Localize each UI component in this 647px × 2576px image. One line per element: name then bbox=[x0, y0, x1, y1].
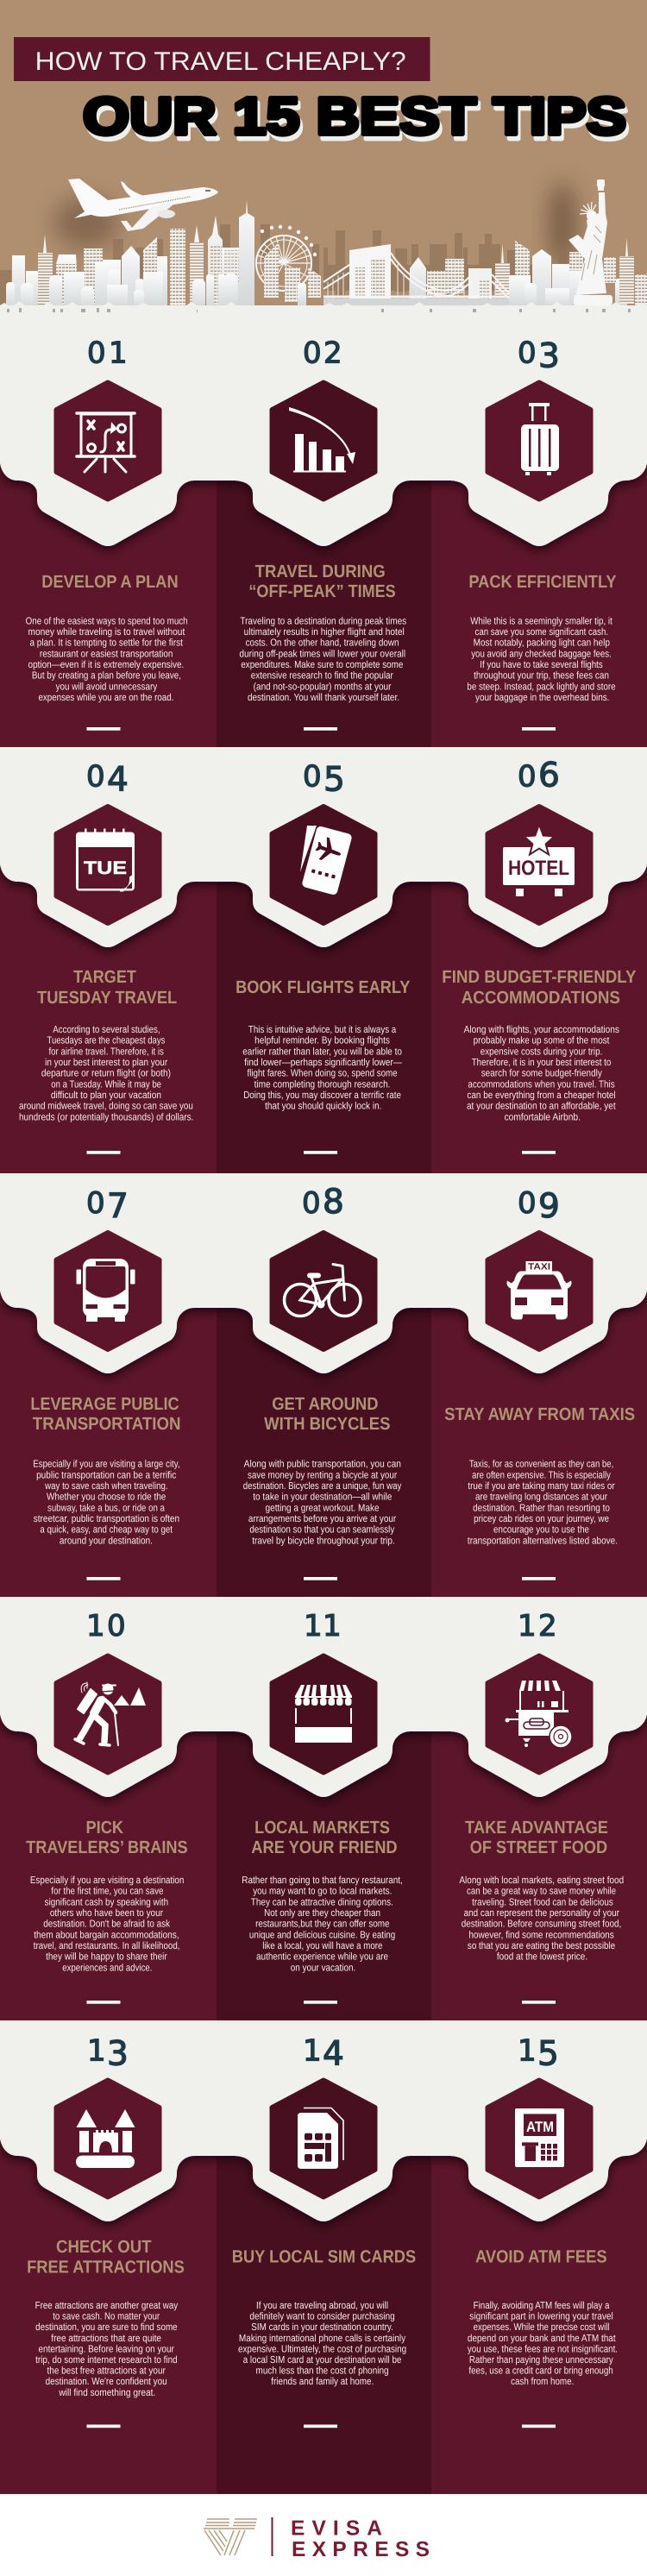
body text: cash from home. bbox=[511, 2376, 574, 2387]
body text bbox=[19, 1024, 193, 1122]
number 06: 6 bbox=[538, 757, 560, 795]
body text bbox=[242, 1024, 402, 1112]
body text: trip, do some internet research to find bbox=[35, 2354, 178, 2366]
icon: market stall bbox=[273, 1656, 374, 1772]
body text: destination. We're confident you bbox=[46, 2376, 167, 2387]
icon: falling bar chart bbox=[273, 383, 374, 499]
heading bbox=[26, 1818, 188, 1857]
body text: expensive costs during your trip. bbox=[481, 1046, 602, 1057]
body text: accommodations when you travel. This bbox=[468, 1078, 615, 1090]
panel: tip 05 book flights early bbox=[236, 760, 411, 1154]
body text: true if you are taking many taxi rides or bbox=[468, 1480, 615, 1492]
panel: tip 08 get around with bicycles bbox=[243, 1183, 402, 1580]
number 08: 0 bbox=[302, 1186, 321, 1221]
body text bbox=[30, 1875, 184, 1973]
panel: row 1 background bbox=[0, 312, 647, 747]
icon: bus bbox=[57, 1233, 159, 1349]
panel: tip 11 local markets are your friend bbox=[242, 1609, 403, 2004]
illustration: city skyline bbox=[0, 179, 647, 315]
number 15: 1 bbox=[518, 2034, 537, 2069]
number 10: 0 bbox=[107, 1609, 126, 1643]
body text: around midweek travel, doing so can save you bbox=[19, 1101, 193, 1112]
panel: tip 02 travel during off-peak times bbox=[239, 336, 406, 731]
body text bbox=[467, 615, 616, 703]
heading: BOOK FLIGHTS EARLY bbox=[236, 977, 411, 997]
body text: however, find some recommendations bbox=[468, 1929, 614, 1940]
body text bbox=[33, 1459, 180, 1546]
body text: Doing this, you may discover a terrific rate bbox=[243, 1090, 401, 1101]
heading bbox=[465, 1818, 608, 1857]
body text: to save cash. No matter your bbox=[53, 2311, 160, 2322]
footer: evisa express logo bbox=[204, 2517, 430, 2561]
body text: be steep. Instead, pack lightly and store bbox=[467, 681, 616, 692]
body text bbox=[459, 1875, 624, 1963]
number 07: 7 bbox=[107, 1187, 129, 1226]
wheel bbox=[256, 236, 311, 291]
heading: “OFF-PEAK” TIMES bbox=[248, 581, 396, 601]
body text: so that you are eating the best possible bbox=[468, 1940, 615, 1951]
icon: suitcase bbox=[488, 383, 590, 499]
heading: AVOID ATM FEES bbox=[475, 2247, 607, 2267]
body text: public transportation can be a terrific bbox=[36, 1469, 176, 1480]
panel: header background bbox=[0, 0, 647, 309]
body text: Therefore, it is in your best interest to bbox=[472, 1057, 611, 1068]
body text: they will be happy to share their bbox=[46, 1951, 167, 1963]
body text: If you have to take several flights bbox=[480, 659, 603, 670]
body text: hundreds (or potentially thousands) of dollars. bbox=[19, 1111, 193, 1122]
number 14: 1 bbox=[303, 2034, 322, 2069]
body text: Along with public transportation, you can bbox=[244, 1459, 401, 1470]
heading bbox=[264, 1394, 390, 1434]
body text: on your vacation. bbox=[291, 1962, 355, 1973]
icon: street food cart bbox=[488, 1656, 590, 1772]
body text: the best free attractions at your bbox=[47, 2366, 166, 2377]
number 09: 9 bbox=[538, 1187, 560, 1226]
heading: TRAVELERS’ BRAINS bbox=[26, 1838, 188, 1857]
heading bbox=[27, 2237, 185, 2278]
body text: experiences and advice. bbox=[62, 1962, 152, 1973]
body text: will find something great. bbox=[59, 2387, 155, 2398]
right blocks bbox=[515, 241, 530, 302]
body text: If you are traveling abroad, you will bbox=[256, 2300, 388, 2311]
body text: depend on your bank and the ATM that bbox=[468, 2333, 616, 2344]
body text: definitely want to consider purchasing bbox=[249, 2311, 395, 2322]
number 01: 0 bbox=[87, 336, 106, 371]
icon: logo mark bbox=[204, 2519, 257, 2555]
body text: Taxis, for as convenient as they can be, bbox=[469, 1459, 613, 1470]
body text: destination. Before consuming street food, bbox=[462, 1919, 621, 1930]
body text: destination. You will thank yourself later. bbox=[248, 692, 399, 703]
body text: expensive. Ultimately, the cost of purchasing bbox=[238, 2343, 406, 2354]
number 11: 1 bbox=[304, 1609, 323, 1643]
body text: way to save cash when traveling. bbox=[44, 1480, 168, 1492]
heading: PACK EFFICIENTLY bbox=[468, 572, 617, 592]
body text: Free attractions are another great way bbox=[35, 2300, 178, 2311]
number 02: 2 bbox=[324, 336, 342, 371]
heading: ARE YOUR FRIEND bbox=[251, 1838, 398, 1857]
heading: STAY AWAY FROM TAXIS bbox=[444, 1404, 635, 1424]
body text: While this is a seemingly smaller tip, it bbox=[470, 615, 612, 626]
heading bbox=[251, 1818, 398, 1857]
body text: earlier rather than later, you will be able to bbox=[242, 1046, 402, 1057]
heading: BUY LOCAL SIM CARDS bbox=[232, 2247, 416, 2267]
number 12: 2 bbox=[538, 1609, 557, 1643]
icon: hotel sign: HOTEL bbox=[508, 857, 569, 880]
body text: entertaining. Before leaving on your bbox=[38, 2343, 174, 2354]
body text: on a Tuesday. While it may be bbox=[51, 1078, 161, 1090]
body text: throughout your trip, these fees can bbox=[474, 670, 609, 682]
panel: tip 06 find budget-friendly accommodations bbox=[442, 757, 637, 1154]
heading: LOCAL MARKETS bbox=[254, 1818, 390, 1838]
heading bbox=[442, 967, 637, 1008]
houses row bbox=[0, 301, 647, 315]
number 01: 1 bbox=[109, 336, 128, 371]
title: our 15 best tips: OUR 15 BEST TIPS bbox=[85, 91, 629, 150]
wordmark: EVISA bbox=[291, 2517, 382, 2540]
body text: time completing thorough research. bbox=[254, 1078, 390, 1090]
body text: getting a great workout. Make bbox=[266, 1502, 380, 1513]
panel: tip 12 take advantage of street food bbox=[459, 1609, 624, 2004]
body text: that you should quickly lock in. bbox=[265, 1101, 381, 1112]
body text: destination. Rather than resorting to bbox=[473, 1502, 610, 1513]
body text bbox=[26, 615, 188, 703]
heading: CHECK OUT bbox=[56, 2237, 152, 2257]
panel: tip 14 buy local sim cards bbox=[232, 2034, 416, 2428]
icon: hiker bbox=[57, 1656, 159, 1772]
body text: for airline travel. Therefore, it is bbox=[48, 1046, 164, 1057]
body text: destination. Bicycles are a unique, fun way bbox=[243, 1480, 402, 1492]
body text: significant part in lowering your travel bbox=[469, 2311, 613, 2322]
icon: boarding pass bbox=[273, 807, 374, 923]
number 08: 8 bbox=[323, 1183, 344, 1222]
heading: TRANSPORTATION bbox=[33, 1414, 180, 1434]
body text: search for some budget-friendly bbox=[481, 1068, 602, 1079]
body text: probably make up some of the most bbox=[474, 1035, 610, 1046]
body text: around your destination. bbox=[60, 1535, 153, 1546]
body text: difficult to plan your vacation bbox=[51, 1090, 161, 1101]
body text: (and not-so-popular) months at your bbox=[254, 681, 392, 692]
body text: fees, use a credit card or bring enough bbox=[468, 2366, 613, 2377]
body text: a local SIM card at your destination will be bbox=[243, 2354, 401, 2366]
body text: you avoid any checked baggage fees. bbox=[471, 648, 612, 659]
icon: bicycle bbox=[273, 1233, 374, 1349]
number 07: 0 bbox=[86, 1186, 105, 1221]
panel: tip 13 check out free attractions bbox=[27, 2034, 185, 2428]
heading bbox=[30, 1394, 180, 1434]
body text: and can represent the personality of your bbox=[464, 1907, 619, 1919]
icon: bouncy castle bbox=[57, 2081, 159, 2196]
heading: FIND BUDGET-FRIENDLY bbox=[442, 967, 637, 987]
body text: encourage you to use the bbox=[493, 1524, 589, 1536]
bridge bbox=[349, 244, 391, 299]
heading bbox=[248, 562, 396, 601]
number 05: 5 bbox=[324, 761, 345, 800]
body text: Whether you choose to ride the bbox=[47, 1492, 166, 1503]
number 15: 5 bbox=[537, 2034, 559, 2074]
panel: tip 09 stay away from taxis bbox=[444, 1186, 635, 1580]
body text: They can be attractive dining options. bbox=[251, 1896, 393, 1907]
body text: This is intuitive advice, but it is always a bbox=[248, 1024, 397, 1035]
body text bbox=[468, 2300, 618, 2387]
wordmark bbox=[291, 2517, 430, 2561]
body text bbox=[464, 1024, 619, 1122]
number 06: 0 bbox=[518, 760, 537, 795]
body text: Tuesdays are the cheapest days bbox=[47, 1035, 165, 1046]
body text bbox=[238, 2300, 406, 2387]
panel: row 2 background bbox=[0, 747, 647, 1173]
icon: calendar: TUE bbox=[84, 858, 127, 878]
body text: streetcar, public transportation is often bbox=[34, 1513, 179, 1524]
illustration: airplane bbox=[68, 179, 218, 231]
number 02: 0 bbox=[303, 336, 322, 371]
number 11: 1 bbox=[323, 1609, 342, 1643]
body text: One of the easiest ways to spend too much bbox=[26, 615, 188, 626]
heading: how to travel cheaply bbox=[14, 37, 430, 81]
body text: at your destination to an affordable, yet bbox=[467, 1101, 616, 1112]
body text: But by creating a plan before you leave, bbox=[32, 670, 181, 682]
number 04: 4 bbox=[107, 761, 129, 800]
icon: taxi bbox=[488, 1233, 590, 1349]
panel: tip 01 develop a plan bbox=[26, 336, 188, 731]
body text bbox=[35, 2300, 178, 2398]
heading: ACCOMMODATIONS bbox=[462, 988, 620, 1008]
heading: WITH BICYCLES bbox=[264, 1414, 390, 1434]
body text: destination. Don't be afraid to ask bbox=[43, 1919, 170, 1930]
panel: tip 07 leverage public transportation bbox=[30, 1186, 180, 1580]
body text: helpful reminder. By booking flights bbox=[254, 1035, 390, 1046]
heading: TAKE ADVANTAGE bbox=[465, 1818, 608, 1838]
body text: much less than the cost of phoning bbox=[256, 2366, 389, 2377]
body text: pricey cab rides on your journey, we bbox=[474, 1513, 609, 1524]
heading: OF STREET FOOD bbox=[470, 1838, 607, 1857]
body text: others who have been to your bbox=[50, 1907, 163, 1919]
body text: option—even if it is extremely expensive. bbox=[28, 659, 184, 670]
body text: arrangements before you arrive at your bbox=[248, 1513, 396, 1524]
body text: travel by bicycle throughout your trip. bbox=[252, 1535, 395, 1546]
body text: extensive research to find the popular bbox=[251, 670, 393, 682]
body text: can save you some significant cash. bbox=[475, 626, 608, 638]
wordmark: EXPRESS bbox=[292, 2538, 430, 2561]
body text: in your best interest to plan your bbox=[45, 1057, 167, 1068]
number 10: 1 bbox=[86, 1609, 105, 1643]
body text: free attractions that are quite bbox=[51, 2333, 161, 2344]
heading: DEVELOP A PLAN bbox=[41, 572, 179, 592]
heading: LEVERAGE PUBLIC bbox=[30, 1394, 179, 1414]
body text bbox=[239, 615, 406, 703]
icon: sim cards bbox=[273, 2081, 374, 2196]
body text: Especially if you are visiting a destination bbox=[30, 1875, 184, 1886]
body text: traveling. Street food can be delicious bbox=[472, 1896, 613, 1907]
panel: row 3 background bbox=[0, 1173, 647, 1597]
body text: you use, these fees are not insignificant. bbox=[468, 2343, 618, 2354]
body text: you may want to go to local markets. bbox=[253, 1886, 392, 1897]
body text: can be everything from a cheaper hotel bbox=[467, 1090, 616, 1101]
body text: comfortable Airbnb. bbox=[504, 1111, 581, 1122]
body text: you will avoid unnecessary bbox=[56, 681, 157, 692]
body text: during off-peak times will lower your overall bbox=[239, 648, 405, 659]
body text: Along with flights, your accommodations bbox=[464, 1024, 619, 1035]
body text: costs. On the other hand, traveling down bbox=[246, 638, 399, 649]
body text: expenses while you are on the road. bbox=[38, 692, 173, 703]
body text: Along with local markets, eating street food bbox=[459, 1875, 624, 1886]
body text: According to several studies, bbox=[53, 1024, 160, 1035]
body text: them about bargain accommodations, bbox=[34, 1929, 179, 1940]
body text: a quick, easy, and cheap way to get bbox=[40, 1524, 173, 1536]
body text: Making international phone calls is certainly bbox=[239, 2333, 405, 2344]
panel: row 5 background bbox=[0, 2020, 647, 2494]
body text: authentic experience while you are bbox=[256, 1951, 388, 1963]
body text: friends and family at home. bbox=[271, 2376, 374, 2387]
number 03: 3 bbox=[538, 337, 560, 376]
body text: Finally, avoiding ATM fees will play a bbox=[474, 2300, 610, 2311]
body text: are often expensive. This is especially bbox=[472, 1469, 611, 1480]
body text: Traveling to a destination during peak times bbox=[240, 615, 406, 626]
body text: flight fares. When doing so, spend some bbox=[248, 1068, 398, 1079]
body text: SIM cards in your destination country. bbox=[251, 2322, 393, 2333]
body text bbox=[468, 1459, 618, 1546]
number 13: 1 bbox=[87, 2034, 106, 2069]
icon: atm machine bbox=[488, 2081, 590, 2196]
body text: subway, take a bus, or ride on a bbox=[47, 1502, 165, 1513]
body text: a plan. It is tempting to settle for the first bbox=[29, 638, 184, 649]
heading: GET AROUND bbox=[272, 1394, 379, 1414]
body text: are traveling long distances at your bbox=[475, 1492, 607, 1503]
panel: tip 04 target tuesday travel bbox=[19, 760, 193, 1154]
body text: Especially if you are visiting a large city, bbox=[33, 1459, 180, 1470]
body text: save money by renting a bicycle at your bbox=[248, 1469, 397, 1480]
body text: food at the lowest price. bbox=[497, 1951, 587, 1963]
icon: strategy board bbox=[57, 383, 159, 499]
body text: money while traveling is to travel without bbox=[28, 626, 185, 638]
panel: tip 15 avoid atm fees bbox=[468, 2034, 618, 2428]
body text: expenditures. Make sure to complete some bbox=[241, 659, 403, 670]
body text bbox=[242, 1875, 403, 1973]
heading: how to travel cheaply: HOW TO TRAVEL CHEAPLY? bbox=[35, 47, 406, 76]
number 12: 1 bbox=[518, 1609, 537, 1643]
statue of liberty bbox=[568, 179, 612, 305]
body text: for the first time, you can save bbox=[51, 1886, 163, 1897]
body text: Most notably, packing light can help bbox=[474, 638, 610, 649]
body text: destination, you are sure to find some bbox=[35, 2322, 178, 2333]
number 09: 0 bbox=[518, 1186, 537, 1221]
body text: travel, and restaurants. In all likelihood, bbox=[34, 1940, 180, 1951]
number 03: 0 bbox=[518, 336, 537, 371]
body text: restaurants,but they can offer some bbox=[255, 1919, 390, 1930]
title: our 15 best tips: OUR 15 BEST TIPS bbox=[83, 86, 626, 145]
heading: FREE ATTRACTIONS bbox=[27, 2258, 185, 2278]
heading: TRAVEL DURING bbox=[255, 562, 386, 581]
number 05: 0 bbox=[303, 760, 322, 795]
body text: find lower—perhaps significantly lower— bbox=[244, 1057, 402, 1068]
icon: calendar bbox=[57, 807, 159, 923]
body text: your baggage in the overhead bins. bbox=[475, 692, 609, 703]
foreground rounded towers bbox=[6, 261, 306, 308]
heading: TUESDAY TRAVEL bbox=[37, 988, 177, 1008]
body text: Rather than paying these unnecessary bbox=[469, 2354, 613, 2366]
body text: Rather than going to that fancy restaurant, bbox=[242, 1875, 403, 1886]
panel: tip 10 pick travelers' brains bbox=[26, 1609, 188, 2004]
heading: PICK bbox=[85, 1818, 123, 1838]
body text: departure or return flight (or both) bbox=[41, 1068, 171, 1079]
body text: destination so that you can seamlessly bbox=[249, 1524, 394, 1536]
number 04: 0 bbox=[86, 760, 105, 795]
body text: unique and delicious cuisine. By eating bbox=[249, 1929, 395, 1940]
number 13: 3 bbox=[107, 2034, 129, 2074]
body text: ultimately results in higher flight and hotel bbox=[244, 626, 405, 638]
body text: restaurant or easiest transportation bbox=[40, 648, 173, 659]
body text: significant cash by speaking with bbox=[45, 1896, 168, 1907]
icon: taxi: TAXI bbox=[528, 1261, 550, 1272]
body text bbox=[243, 1459, 402, 1546]
heading: TARGET bbox=[73, 967, 136, 987]
number 14: 4 bbox=[323, 2034, 344, 2074]
body text: expenses. While the precise cost will bbox=[474, 2322, 609, 2333]
body text: like a local, you will have a more bbox=[262, 1940, 382, 1951]
panel: tip 03 pack efficiently bbox=[467, 336, 617, 731]
body text: to take in your destination—all while bbox=[253, 1492, 392, 1503]
body text: transportation alternatives listed above. bbox=[468, 1535, 618, 1546]
icon: atm machine: ATM bbox=[526, 2119, 554, 2135]
body text: can be a great way to save money while bbox=[467, 1886, 616, 1897]
panel: row 4 background bbox=[0, 1597, 647, 2020]
heading bbox=[37, 967, 177, 1008]
body text: Not only are they cheaper than bbox=[264, 1907, 380, 1919]
icon: hotel sign bbox=[488, 807, 590, 923]
